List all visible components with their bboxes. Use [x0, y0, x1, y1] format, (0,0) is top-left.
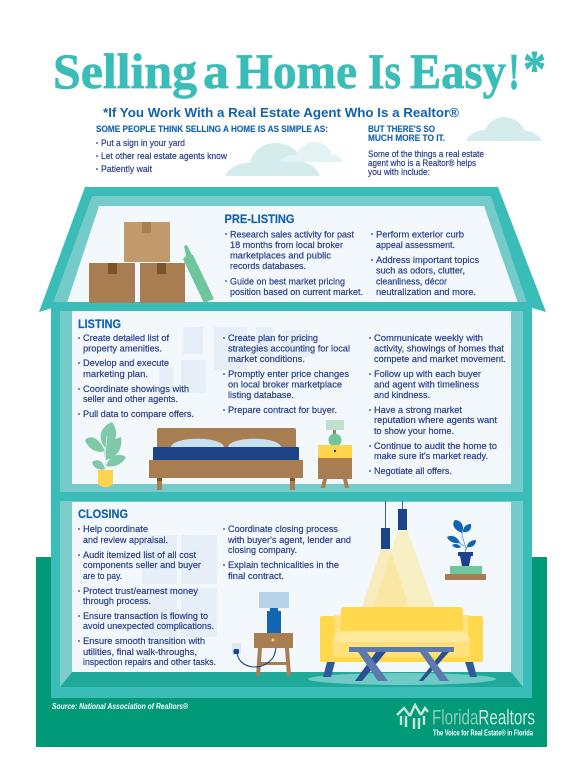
closing column 1: inspection repairs and other tasks.	[83, 657, 216, 668]
pre-listing column 2: such as odors, clutter,	[376, 266, 465, 276]
listing column 1: property amenities.	[83, 344, 162, 354]
green ground block	[36, 557, 547, 747]
listing column 3: and kindness.	[374, 390, 430, 401]
intro bullets: Let other real estate agents know	[101, 151, 227, 162]
pre-listing column 1: 18 months from local broker	[230, 240, 343, 251]
listing column 2: Create plan for pricing	[228, 333, 318, 344]
closing column 1: are to pay.	[83, 571, 122, 582]
intro right text: Some of the things a real estate	[368, 149, 484, 160]
icon: logo houses and people	[397, 705, 428, 729]
icon: bed	[149, 428, 303, 490]
intro bullets: Put a sign in your yard	[101, 138, 185, 149]
house: roof	[39, 187, 546, 312]
closing column 1: Ensure smooth transition with	[83, 636, 205, 647]
listing column 3: compete and market movement.	[374, 354, 506, 365]
listing column 3: reputation where agents want	[374, 415, 497, 426]
pre-listing column 2: cleanliness, décor	[376, 276, 447, 288]
listing column 3	[369, 333, 506, 477]
icon: pendant lights	[362, 501, 435, 607]
pre-listing column 1	[225, 230, 363, 298]
intro left	[96, 124, 328, 175]
closing column 2: closing company.	[228, 545, 297, 556]
icon: shelf plant	[445, 520, 486, 580]
logo wordmark: FloridaRealtors	[432, 706, 535, 730]
listing column 3: Follow up with each buyer	[374, 369, 481, 380]
pre-listing column 1: position based on current market.	[230, 287, 363, 298]
listing column 3: and agent with timeliness	[374, 380, 479, 390]
title: *	[523, 41, 546, 98]
listing column 3: make sure it's market ready.	[374, 451, 488, 462]
icon: moving boxes	[89, 222, 185, 303]
intro bullets: Patiently wait	[101, 164, 152, 175]
listing column 2: listing database.	[228, 390, 294, 401]
closing column 1	[78, 524, 216, 668]
panel: listing	[60, 311, 523, 492]
intro right text	[368, 149, 484, 178]
listing column 2: Prepare contract for buyer.	[228, 405, 337, 416]
listing column 1: Create detailed list of	[83, 333, 169, 344]
icon: table lamp, side table and plug	[232, 592, 293, 676]
panel: closing	[60, 501, 523, 687]
closing column 1: and review appraisal.	[83, 535, 168, 546]
logo: Florida Realtors	[397, 705, 535, 738]
pre-listing column 1: marketplaces and public	[230, 250, 331, 262]
title: Selling	[53, 43, 197, 99]
closing column 2: Coordinate closing process	[228, 524, 338, 535]
closing column 1: through process.	[83, 596, 151, 607]
title	[53, 41, 546, 99]
title: !	[509, 43, 519, 99]
listing column 2: Promptly enter price changes	[228, 369, 349, 380]
panel: pre-listing	[89, 214, 479, 303]
cloud: centre light	[280, 142, 343, 162]
title: a	[203, 43, 229, 99]
intro right	[368, 124, 484, 178]
listing column 2: on local broker marketplace	[228, 380, 342, 390]
listing column 3: Negotiate all offers.	[374, 466, 452, 477]
pre-listing column 2: appeal assessment.	[376, 240, 455, 251]
closing column 1: components seller and buyer	[83, 560, 201, 571]
cloud: right	[466, 117, 542, 141]
intro right heading: BUT THERE'S SO	[368, 124, 435, 134]
icon: rolled rug	[183, 245, 214, 303]
intro right text: you with include:	[368, 167, 430, 178]
listing column 1: marketing plan.	[83, 369, 148, 380]
listing column 1: Coordinate showings with	[83, 384, 189, 395]
listing column 1	[78, 333, 194, 420]
closing column 2	[223, 524, 351, 582]
listing column 2: strategies accounting for local	[228, 344, 350, 354]
listing column 2	[223, 333, 350, 416]
source note: Source: National Association of Realtors®	[52, 702, 188, 711]
title: Easy	[410, 43, 506, 99]
intro right text: agent who is a Realtor® helps	[368, 158, 476, 169]
pre-listing column 1: records databases.	[230, 261, 306, 272]
intro right heading	[368, 124, 445, 143]
closing column 1: Help coordinate	[83, 524, 148, 535]
title: Is	[368, 43, 401, 99]
intro right heading: MUCH MORE TO IT.	[368, 133, 445, 143]
closing column 1: Ensure transaction is flowing to	[83, 611, 208, 622]
heading: closing: CLOSING	[78, 509, 128, 521]
closing column 1: Protect trust/earnest money	[83, 586, 198, 597]
icon: rug	[308, 673, 496, 685]
pre-listing column 1: Research sales activity for past	[230, 230, 354, 240]
subtitle: *If You Work With a Real Estate Agent Who Is a Realtor®	[103, 106, 460, 120]
pre-listing column 1: Guide on best market pricing	[230, 276, 345, 288]
listing column 3: Have a strong market	[374, 405, 462, 416]
closing column 2: Explain technicalities in the	[228, 560, 339, 571]
listing column 3: Communicate weekly with	[374, 333, 483, 344]
listing column 3: to show your home.	[374, 426, 454, 437]
title: Home	[236, 43, 357, 99]
closing column 1: utilities, final walk-throughs,	[83, 647, 197, 658]
heading: listing: LISTING	[78, 319, 121, 331]
intro heading: SOME PEOPLE THINK SELLING A HOME IS AS SIMPLE AS:	[96, 124, 328, 134]
listing column 2: market conditions.	[228, 354, 305, 365]
cloud: centre	[225, 143, 320, 176]
heading: pre-listing: PRE-LISTING	[224, 214, 295, 226]
closing column 1: avoid unexpected complications.	[83, 621, 214, 632]
pre-listing column 2: neutralization and more.	[376, 287, 476, 298]
wall frames	[159, 327, 310, 393]
pre-listing column 2	[371, 230, 479, 298]
listing column 3: activity, showings of homes that	[374, 344, 504, 354]
pre-listing column 2: Perform exterior curb	[376, 230, 464, 240]
icon: nightstand and lamp	[318, 420, 352, 488]
listing column 3: Continue to audit the home to	[374, 441, 497, 452]
wall frames	[142, 535, 217, 637]
listing column 1: Develop and execute	[83, 358, 169, 369]
intro bullets	[96, 138, 227, 175]
closing column 2: final contract.	[228, 571, 284, 582]
closing column 1: Audit itemized list of all cost	[83, 550, 196, 561]
house: walls outer	[51, 305, 532, 698]
icon: potted plant	[85, 422, 126, 487]
logo tagline: The Voice for Real Estate® in Florida	[433, 728, 533, 738]
pre-listing column 2: Address important topics	[376, 255, 479, 266]
closing column 2: with buyer's agent, lender and	[227, 535, 351, 546]
listing column 1: Pull data to compare offers.	[83, 409, 194, 420]
icon: sofa and coffee table	[320, 607, 483, 681]
listing column 1: seller and other agents.	[83, 394, 178, 405]
